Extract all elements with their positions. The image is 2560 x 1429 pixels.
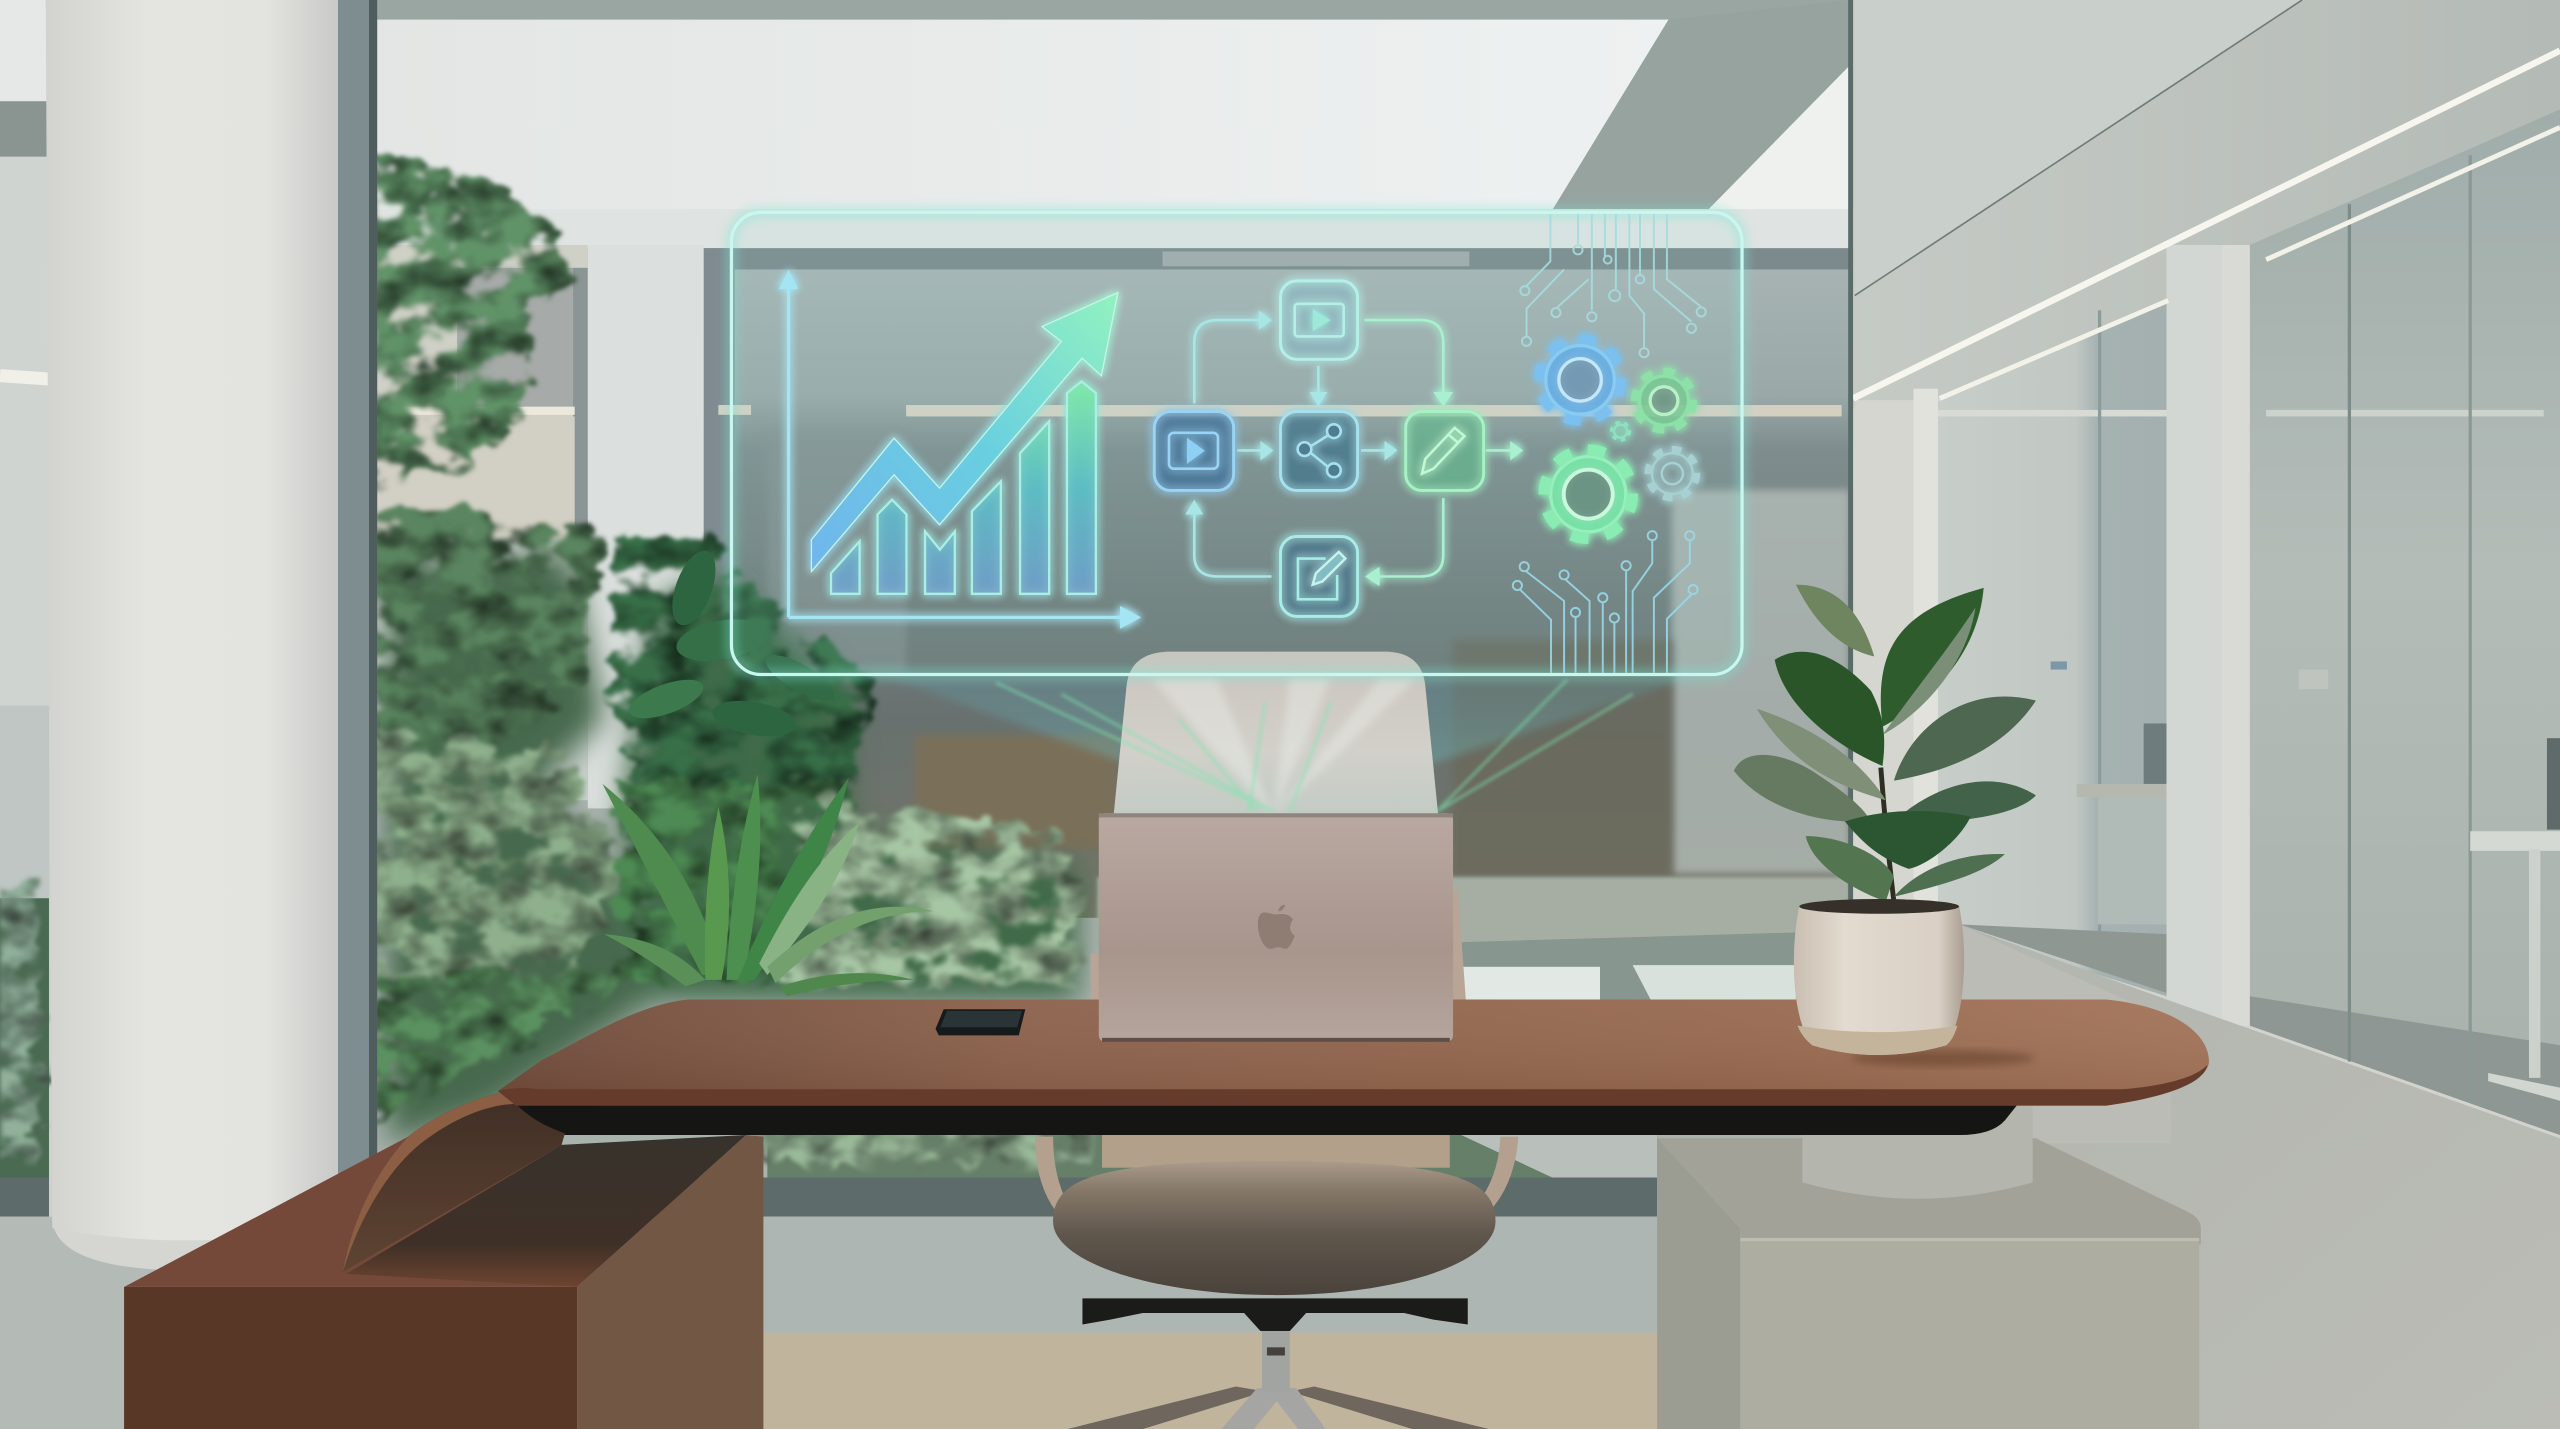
far wall [1855,400,1913,923]
leaf cluster [1734,585,2036,901]
foliage: broad dark leaves [624,545,840,742]
left pedestal [124,1135,763,1429]
foliage: soft mass [389,555,1078,1143]
left glass room [376,245,588,539]
projector beams [890,678,1690,817]
workflow node: pencil [1406,412,1484,490]
circuit traces: bottom [1513,531,1698,673]
right glass wall [2250,109,2560,1135]
holographic panel [731,212,1742,674]
chair lower back and arms [1035,1135,1518,1212]
smartphone [936,1009,1025,1035]
chair seat and base [1053,1161,1496,1429]
gear: small green [1635,371,1693,430]
laptop [1099,813,1453,1042]
rising arrow [811,292,1118,571]
workflow node: share [1280,412,1358,490]
circuit traces: top [1520,214,1706,357]
courtyard and back glass [376,0,1850,1200]
left window strip [0,0,49,1179]
plant [1734,585,2036,1055]
bar chart [831,382,1096,594]
glass room one [1938,300,2167,996]
foliage: mottled leaves [0,154,1094,1166]
desk top [498,999,2209,1106]
white column in courtyard [588,245,704,808]
glass wall behind hologram [704,248,1850,918]
window frame [338,0,377,1179]
right pedestal [1657,1138,2201,1429]
ceiling [1850,0,2560,408]
foliage [0,154,1094,1166]
pot [1794,906,1964,1055]
gear: large green [1544,450,1632,538]
gear: blue [1539,339,1621,421]
chart axes [779,269,1141,629]
right support cylinder [1802,1102,2033,1199]
gears [1539,339,1697,538]
desk: left waterfall ribbon [343,1088,565,1272]
ceiling light strips [1853,51,2560,398]
right corridor [1848,0,2560,1429]
chair backrest [996,652,1633,817]
desk: underside shadow [516,1104,2018,1135]
foliage: sword plant [602,774,934,996]
gear: outline [1648,449,1697,498]
chair upper sides behind desk [1091,890,1466,1004]
workflow node: edit [1280,536,1358,616]
workflow node: left video [1154,412,1234,490]
white column [46,0,338,1271]
gear: tiny [1612,422,1630,440]
icon: apple logo [1258,905,1295,949]
workflow node: top video [1280,281,1358,359]
floor [1959,924,2560,1429]
floor and carpet [0,1177,1698,1429]
structural column [2167,245,2250,1026]
skylight [376,20,1669,212]
workflow arrows [1185,310,1523,586]
